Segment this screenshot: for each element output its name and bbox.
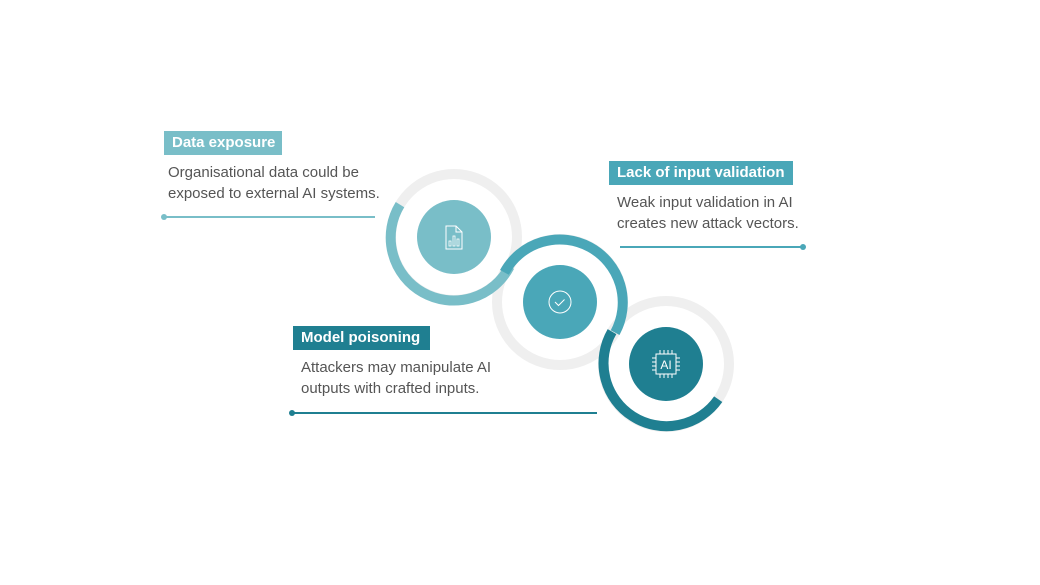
ring 3 arc [604, 332, 718, 426]
ring 2 background [497, 239, 623, 365]
icon circle 1: document chart [417, 200, 491, 274]
text: model poisoning: Attackers may manipulate AI [301, 359, 491, 376]
icon circle 3: AI chip [629, 327, 703, 401]
ring 1 arc [391, 205, 510, 301]
text: model poisoning [301, 359, 491, 397]
heading: lack of input validation: Lack of input validation [617, 164, 785, 181]
ring 2 arc [504, 239, 623, 333]
ring 3 background [603, 301, 729, 427]
heading: data exposure: Data exposure [172, 134, 275, 151]
line: data exposure [161, 214, 375, 220]
text: lack of input validation: creates new attack vectors. [617, 215, 799, 232]
line: lack of input validation [620, 244, 806, 250]
text: data exposure [168, 164, 380, 202]
heading: model poisoning [293, 326, 430, 350]
text: data exposure: Organisational data could be [168, 164, 359, 181]
icon circle 2: check [523, 265, 597, 339]
heading: lack of input validation [609, 161, 793, 185]
text: lack of input validation: Weak input validation in AI [617, 194, 793, 211]
text: model poisoning: outputs with crafted inputs. [301, 380, 479, 397]
icon circle 3: AI chip: AI [660, 358, 672, 372]
ring 1 background [391, 174, 517, 300]
heading: data exposure [164, 131, 282, 155]
text: data exposure: exposed to external AI systems. [168, 185, 380, 202]
line: model poisoning [289, 410, 597, 416]
heading: model poisoning: Model poisoning [301, 329, 420, 346]
text: lack of input validation [617, 194, 799, 232]
